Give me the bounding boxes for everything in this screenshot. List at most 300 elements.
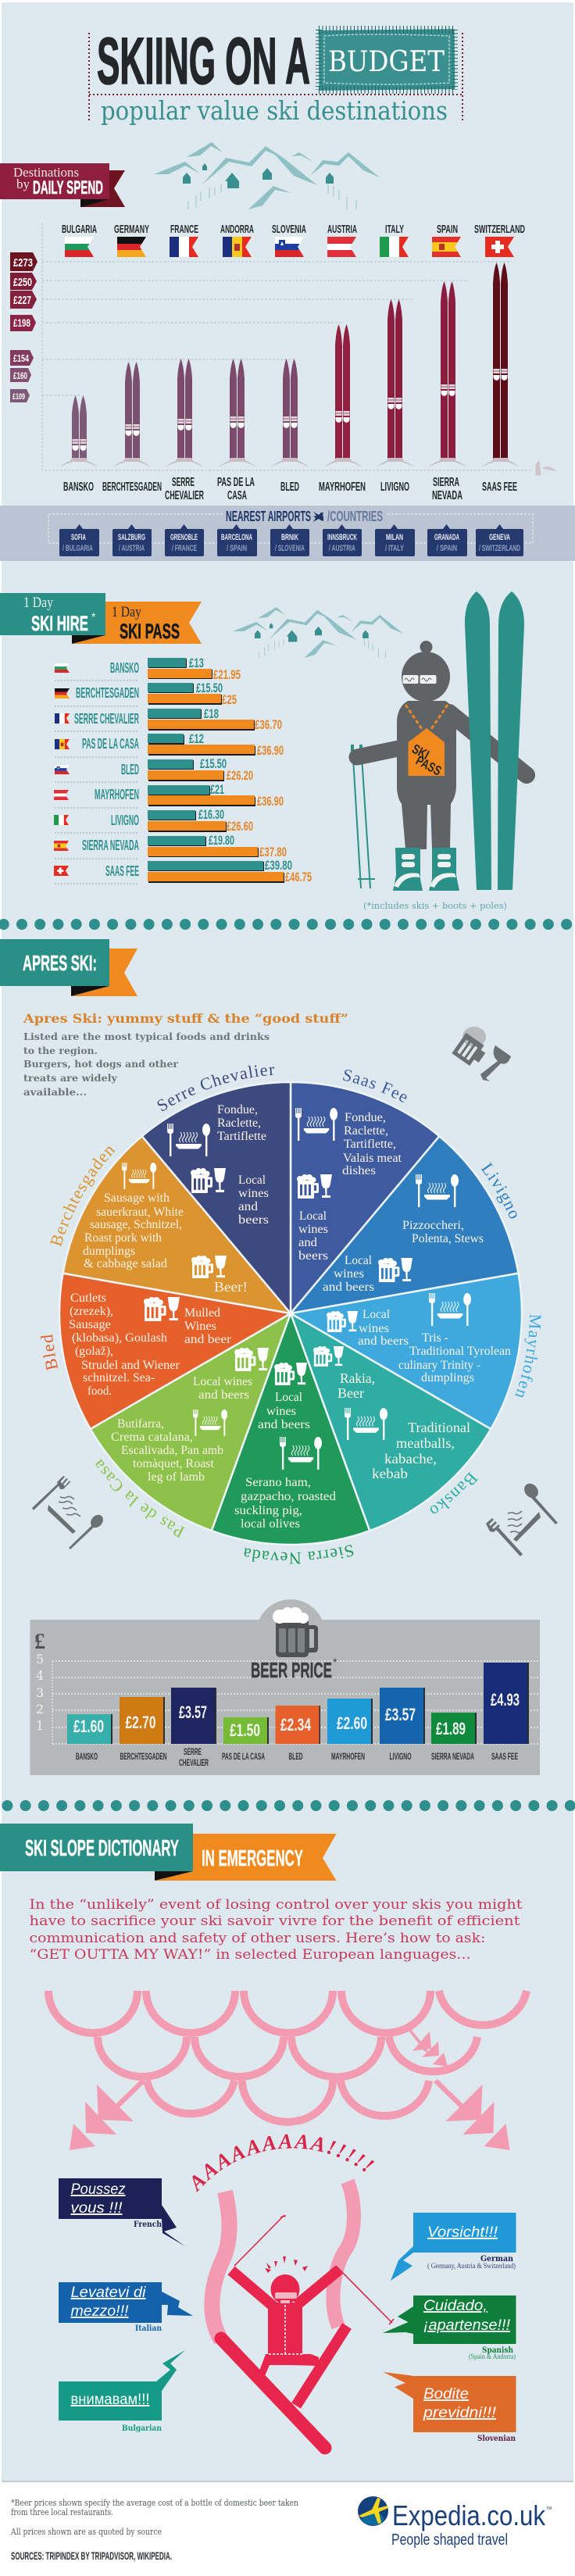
airport tags: BRNIK <box>281 533 298 542</box>
pie text: leg of lamb <box>148 1470 205 1484</box>
apres ski description: to the region. <box>23 1045 98 1056</box>
beer bar labels <box>76 1746 518 1768</box>
arrow: small <box>408 2028 448 2067</box>
slice: Bled <box>59 1274 291 1429</box>
beer bars: £3.57 <box>385 1705 416 1724</box>
pie text: Strudel and Wiener <box>81 1359 180 1372</box>
pie text: Escalivada, Pan amb <box>121 1444 223 1457</box>
ski hire and pass bar chart: £46.75 <box>285 870 312 884</box>
price tags: £109 <box>12 392 25 402</box>
slice: Serre Chevalier <box>142 1082 291 1313</box>
beer bar labels: BANSKO <box>76 1751 98 1762</box>
pie text: (klobasa), Goulash <box>72 1331 167 1345</box>
title <box>89 24 462 126</box>
expedia logo <box>358 2496 552 2549</box>
pie text: Valais meat <box>343 1152 402 1165</box>
footer notes: from three local restaurants. <box>11 2506 113 2517</box>
airport tags: GRENOBLE <box>170 533 198 542</box>
slice: Pas de la Casa <box>91 1313 291 1531</box>
country names and flags: SPAIN <box>437 223 458 236</box>
footer notes <box>10 2497 298 2562</box>
pie text: suckling pig, <box>234 1504 302 1517</box>
title: popular value ski destinations <box>101 95 448 126</box>
icon: beer mug <box>273 1607 318 1657</box>
ski hire and pass bar chart: £26.60 <box>227 819 253 834</box>
nearest airports band: /COUNTRIES <box>327 509 383 524</box>
pie text: Cutlets <box>70 1292 106 1305</box>
airport tags: / SWITZERLAND <box>479 544 520 553</box>
apres ski description: Listed are the most typical foods and drinks <box>23 1031 270 1042</box>
ski hire and pass bar chart: BERCHTESGADEN <box>76 685 139 701</box>
beer bar labels: LIVIGNO <box>389 1751 411 1762</box>
resort names: PAS DE LA <box>217 476 255 489</box>
pie text: Mulled <box>184 1306 220 1320</box>
airport tags: INNSBRUCK <box>327 533 357 542</box>
apres ski description <box>23 1031 270 1098</box>
speech bubble: German: Vorsicht!!! <box>427 2224 498 2241</box>
price tags: £154 <box>13 352 30 364</box>
pie text: Serano ham, <box>245 1476 311 1489</box>
country names and flags: FRANCE <box>170 223 198 236</box>
ribbon: destinations by daily spend: by <box>16 177 30 191</box>
airport tags: / AUSTRIA <box>119 544 145 553</box>
pie text: kabache, <box>384 1451 437 1467</box>
ski hire and pass bar chart: £25 <box>222 692 237 707</box>
ribbon: ski hire and ski pass <box>0 593 202 644</box>
pie text: Local <box>275 1391 302 1404</box>
ski tracks above skier <box>212 2181 354 2340</box>
price tags: £160 <box>13 370 27 381</box>
beer bars: £2.70 <box>125 1713 156 1732</box>
ski hire and pass bar chart: MAYRHOFEN <box>95 787 139 802</box>
beer price title: BEER PRICE <box>251 1658 332 1682</box>
pie text: dumplings <box>83 1245 135 1258</box>
ski hire and pass bar chart: £12 <box>189 731 204 746</box>
bar shadows <box>148 659 284 883</box>
speech bubble: Bulgarian <box>59 2350 185 2433</box>
pie text: Local <box>362 1308 390 1321</box>
country names and flags: BULGARIA <box>62 223 97 236</box>
beer bars: £3.57 <box>179 1702 207 1722</box>
icon: right cutlery <box>486 1481 558 1556</box>
pie text: and <box>298 1236 317 1249</box>
poles <box>352 745 375 888</box>
pie text: Beer <box>338 1385 364 1401</box>
speech bubble: Spanish: (Spain & Andorra) <box>469 2353 516 2360</box>
beer bars: £1.89 <box>436 1719 466 1738</box>
resort names: NEVADA <box>432 489 462 502</box>
apres ski description: treats are widely <box>23 1072 118 1084</box>
skier scream text: AAAAAAAAA!!!!! <box>192 2135 375 2192</box>
speech bubble: French: vous !!! <box>70 2200 123 2217</box>
pie ring labels <box>41 1066 541 1564</box>
expedia logo: People shaped travel <box>391 2531 508 2549</box>
pie text: Local <box>299 1209 327 1223</box>
pie text: Tris - <box>422 1331 448 1345</box>
pie text: (golaž), <box>75 1345 113 1358</box>
pie ring labels: Pas de la Casa <box>95 1458 185 1538</box>
airport tags: / BULGARIA <box>62 544 93 553</box>
price tags <box>10 252 38 402</box>
beer bar labels: BLED <box>289 1751 303 1762</box>
pie text: and beers <box>198 1388 249 1402</box>
icon: grey beer and wine <box>452 1027 511 1081</box>
slice: Bansko <box>291 1313 491 1531</box>
pie text: culinary Trinity - <box>398 1359 480 1372</box>
pie ring labels: Serre Chevalier <box>158 1066 274 1111</box>
apres ski description: Burgers, hot dogs and other <box>23 1058 178 1070</box>
lanyard <box>405 705 448 729</box>
airport tags: / FRANCE <box>172 544 197 553</box>
speech bubble: French: Poussez <box>70 2181 126 2198</box>
speech bubble: Spanish: Cuidado, <box>423 2298 488 2314</box>
arrow: left <box>70 2079 145 2150</box>
country names and flags: GERMANY <box>114 223 149 236</box>
pie text: and beers <box>258 1418 310 1431</box>
ribbon: destinations by daily spend <box>0 163 125 207</box>
speech bubble: Slovenian: previdni!!! <box>423 2405 497 2421</box>
pie ring labels: Berchtesgaden <box>50 1147 116 1247</box>
ribbon: apres ski <box>0 939 138 996</box>
beer bar labels: PAS DE LA CASA <box>222 1751 265 1762</box>
ribbon: ski hire and ski pass: * <box>91 610 96 623</box>
pie text: Beer! <box>214 1279 248 1295</box>
airport tags: GRANADA <box>434 533 459 542</box>
pie text: Fondue, <box>345 1111 386 1124</box>
slice: Saas Fee <box>291 1082 439 1313</box>
ribbon: ski hire and ski pass: SKI HIRE <box>31 612 88 635</box>
beer bar labels: SIERRA NEVADA <box>431 1751 474 1762</box>
ski hire and pass bar chart: LIVIGNO <box>111 813 139 828</box>
ski hire and pass bar chart: £36.90 <box>257 743 284 758</box>
airport tags: / SPAIN <box>437 544 457 553</box>
emergency intro text: have to sacrifice your ski savoir vivre for the benefit of efficient <box>30 1913 520 1929</box>
ski hire and pass bar chart: £19.80 <box>209 833 234 848</box>
footer notes: *Beer prices shown specify the average cost of a bottle of domestic beer taken <box>11 2497 298 2508</box>
ribbon: ski slope dictionary: SKI SLOPE DICTIONARY <box>25 1836 179 1861</box>
airport tags <box>59 524 523 556</box>
country names and flags: SWITZERLAND <box>474 223 525 236</box>
arrow: right <box>434 2079 509 2150</box>
ribbon: ski hire and ski pass: SKI PASS <box>120 620 180 643</box>
speech bubble: French <box>59 2178 185 2246</box>
pie text: schnitzel. Sea- <box>83 1371 155 1384</box>
ribbon: ski hire and ski pass: 1 Day <box>23 595 53 611</box>
ski hire and pass bar chart <box>54 656 312 884</box>
speech bubble: French: French <box>134 2221 162 2229</box>
resort names <box>63 476 517 502</box>
pie text: Traditional <box>408 1420 470 1435</box>
airport tags: / AUSTRIA <box>329 544 355 553</box>
apres ski heading: Apres Ski: yummy stuff & the “good stuff” <box>23 1011 348 1026</box>
speech bubble: Bulgarian: внимавам!!! <box>70 2392 150 2408</box>
pie text: local olives <box>241 1517 300 1531</box>
pie text: (zrezek), <box>70 1305 113 1318</box>
resort names: SERRE <box>172 476 195 489</box>
ribbon: ski slope dictionary: IN EMERGENCY <box>202 1846 303 1871</box>
ski hire and pass bar chart: SERRE CHEVALIER <box>74 711 139 727</box>
beer bars: £4.93 <box>491 1690 520 1710</box>
resort names: BERCHTESGADEN <box>102 481 162 494</box>
ski hire and pass bar chart: BANSKO <box>110 660 139 676</box>
ski pass tag: SKI <box>409 741 431 763</box>
pie text: Raclette, <box>217 1117 261 1130</box>
pie text: Crema catalana, <box>111 1431 193 1444</box>
ski pass tag <box>408 728 445 778</box>
ribbon: apres ski: APRES SKI: <box>23 951 97 975</box>
pie text: Local wines <box>193 1375 252 1388</box>
speech bubble: Spanish <box>383 2296 516 2360</box>
skier with ski pass illustration <box>352 591 527 891</box>
y axis <box>34 1630 45 1733</box>
emergency intro text <box>30 1897 523 1963</box>
ski hire and pass bar chart: SIERRA NEVADA <box>82 838 139 853</box>
pie text: wines <box>334 1267 364 1281</box>
ski hire and pass bar chart: £15.50 <box>200 756 227 771</box>
y axis: 5 <box>36 1652 44 1667</box>
beer price panel <box>30 1599 540 1775</box>
resort names: CASA <box>227 489 247 502</box>
mountains illustration 2 <box>233 607 403 658</box>
pie ring labels: Bled <box>41 1334 58 1370</box>
pie text: Raclette, <box>344 1124 388 1138</box>
speech bubble: German: ( Germany, Austria & Switzerland) <box>427 2262 516 2270</box>
caption: includes: (*includes skis + boots + poles) <box>363 901 507 911</box>
speech bubble: Italian <box>59 2282 193 2333</box>
pie text: meatballs, <box>396 1435 455 1451</box>
speech bubble: Slovenian: Slovenian <box>477 2435 516 2443</box>
country names and flags: ANDORRA <box>220 223 254 236</box>
speech bubble: Spanish: ¡apartense!!! <box>423 2317 511 2334</box>
pie text: and beer <box>184 1333 232 1346</box>
ski hire and pass bar chart: £15.50 <box>196 681 223 695</box>
pie chart: food and drink by resort <box>59 1082 522 1545</box>
icon: plane <box>313 512 323 522</box>
slice: Sierra Nevada <box>212 1313 370 1545</box>
country names and flags: AUSTRIA <box>327 223 357 236</box>
tall skis <box>465 591 491 890</box>
pie text: dumplings <box>421 1371 474 1384</box>
pink ski tracks diagram <box>48 1991 527 2150</box>
skis bar chart <box>59 263 556 475</box>
ski hire and pass bar chart: £26.20 <box>227 768 253 783</box>
ski hire and pass bar chart: £37.80 <box>259 845 287 859</box>
ski hire and pass bar chart: £39.80 <box>265 858 292 873</box>
expedia logo: Expedia.co.uk <box>392 2499 546 2531</box>
speech bubble: German: German <box>480 2255 514 2263</box>
footer notes: All prices shown are as quoted by source <box>10 2526 162 2537</box>
emergency intro text: “GET OUTTA MY WAY!” in selected European languages... <box>30 1947 470 1963</box>
airport tags: / SLOVENIA <box>275 544 305 553</box>
beer bar labels: SAAS FEE <box>491 1751 518 1762</box>
resort names: CHEVALIER <box>165 489 204 502</box>
goggles <box>403 675 436 684</box>
title: SKIING ON A <box>97 24 310 98</box>
pie text: beers <box>298 1249 328 1263</box>
shock marks <box>265 2256 308 2273</box>
pie text: Butifarra, <box>117 1417 164 1431</box>
left arm <box>357 749 398 757</box>
resort names: BLED <box>280 481 299 494</box>
beer price panel: * <box>333 1656 338 1668</box>
pie ring labels: Livigno <box>481 1162 517 1219</box>
pie text: beers <box>238 1213 269 1227</box>
airport tags: / ITALY <box>385 544 404 553</box>
poles <box>234 2215 392 2323</box>
pie text: wines <box>266 1405 296 1418</box>
airport tags: MILAN <box>386 533 403 542</box>
beer bar labels: MAYRHOFEN <box>331 1751 365 1762</box>
body <box>268 2303 302 2357</box>
arms and skis <box>221 2270 347 2448</box>
pie text: wines <box>238 1187 269 1200</box>
beer bar labels: BERCHTESGADEN <box>120 1751 167 1762</box>
resort names: MAYRHOFEN <box>319 481 366 494</box>
falling skier illustration <box>221 2215 394 2448</box>
footer notes: SOURCES: TRIPINDEX BY TRIPADVISOR, WIKIPEDIA. <box>11 2549 172 2562</box>
pie text: gazpacho, roasted <box>241 1490 336 1503</box>
ski hire and pass bar chart: SAAS FEE <box>105 863 139 879</box>
ski pass tag: PASS <box>413 753 444 778</box>
ski hire and pass bar chart: £21.95 <box>213 667 241 682</box>
country names and flags <box>62 223 525 257</box>
ribbon: ski hire and ski pass: 1 Day <box>112 604 141 620</box>
pie text: Traditional Tyrolean <box>409 1345 511 1358</box>
boots <box>393 848 459 891</box>
beer bars: £1.50 <box>230 1720 260 1740</box>
price tags: £198 <box>13 316 30 329</box>
pie ring labels: Bansko <box>430 1472 478 1514</box>
pie text: wines <box>298 1223 328 1236</box>
resort names: BANSKO <box>63 481 94 494</box>
airport tags: SOFIA <box>71 533 86 542</box>
price tags: £250 <box>13 276 32 289</box>
airport tags: SALZBURG <box>118 533 145 542</box>
pie text: Tartiflette, <box>344 1138 396 1151</box>
body and head <box>397 641 456 849</box>
y axis: 3 <box>36 1685 44 1700</box>
price tags: £227 <box>13 294 31 307</box>
slice: Berchtesgaden <box>62 1136 291 1313</box>
pie text: Roast pork with <box>84 1231 162 1245</box>
price tags: £273 <box>13 256 33 270</box>
ribbon: destinations by daily spend: Destinations <box>13 165 79 180</box>
beer bars: £2.34 <box>280 1715 312 1735</box>
speech bubble: Italian: Italian <box>135 2324 162 2333</box>
pie text: kebab <box>372 1466 408 1481</box>
pie text: & cabbage salad <box>84 1257 167 1270</box>
y axis: 1 <box>36 1718 44 1733</box>
ski hire and pass bar chart: BLED <box>121 762 139 777</box>
pie text: Polenta, Stews <box>412 1232 484 1245</box>
pie ring labels: Sierra Nevada <box>244 1545 353 1564</box>
mountains illustration <box>154 142 380 209</box>
right arm <box>449 713 527 775</box>
beer bar labels: SERRE <box>184 1746 202 1757</box>
emergency intro text: In the “unlikely” event of losing control over your skis you might <box>30 1897 523 1913</box>
country names and flags: ITALY <box>385 223 404 236</box>
slice: Livigno <box>291 1136 519 1313</box>
ski hire and pass bar chart: £16.30 <box>198 807 224 822</box>
nearest airports band <box>0 506 575 561</box>
pie text: wines <box>359 1322 389 1335</box>
speech bubble: Slovenian <box>384 2372 516 2443</box>
pie text: sausage, Schnitzel, <box>90 1218 182 1231</box>
ribbon: destinations by daily spend: DAILY SPEND <box>33 177 103 198</box>
resort names: LIVIGNO <box>380 481 409 494</box>
nearest airports band: NEAREST AIRPORTS <box>226 509 311 524</box>
ribbon: ski slope dictionary <box>0 1824 336 1881</box>
pie text: and beers <box>358 1334 409 1348</box>
ski hire and pass bar chart: PAS DE LA CASA <box>82 736 139 752</box>
pie text: Tartiflette <box>217 1130 266 1143</box>
pie text: dishes <box>342 1164 376 1177</box>
pie text: tomàquet, Roast <box>133 1457 215 1470</box>
airport tags: / SPAIN <box>227 544 247 553</box>
ski hire and pass bar chart: £36.70 <box>255 717 282 732</box>
apres ski description: available... <box>23 1086 87 1098</box>
expedia logo: TM <box>546 2506 552 2511</box>
ski hire and pass bar chart: £36.90 <box>257 794 284 809</box>
speech bubble: Italian: Levatevi di <box>70 2285 146 2301</box>
pie text: and <box>238 1200 258 1213</box>
airport tags: BARCELONA <box>221 533 252 542</box>
icon: left cutlery <box>32 1476 105 1549</box>
y axis: £ <box>34 1630 45 1654</box>
country names and flags: SLOVENIA <box>272 223 306 236</box>
head <box>270 2274 300 2304</box>
pie icons <box>122 1108 471 1470</box>
beer bars <box>67 1663 529 1744</box>
speech bubble: German <box>391 2213 516 2281</box>
budget patch: BUDGET <box>328 46 445 78</box>
emergency intro text: communication and safety of other users. Here’s how to ask: <box>30 1931 486 1946</box>
speech bubble: Slovenian: Bodite <box>423 2386 469 2403</box>
beer bars: £1.60 <box>73 1717 104 1736</box>
icon: globe <box>358 2496 388 2526</box>
legs <box>258 2354 319 2383</box>
y axis: 2 <box>36 1702 44 1717</box>
pie ring labels: Saas Fee <box>342 1070 406 1102</box>
pie text: and beers <box>323 1281 374 1294</box>
ski hire and pass bar chart: £13 <box>189 656 204 670</box>
speech bubble: Italian: mezzo!!! <box>70 2303 129 2320</box>
pie text: Sausage <box>69 1318 111 1331</box>
beer bar labels: CHEVALIER <box>179 1757 209 1768</box>
pie text: sauerkraut, White <box>96 1206 184 1219</box>
y axis: 4 <box>36 1668 44 1683</box>
resort names: SIERRA <box>433 476 459 489</box>
pie text: Rakia, <box>340 1370 375 1386</box>
ski hire and pass bar chart: £18 <box>204 706 219 721</box>
pie text <box>69 1103 511 1531</box>
pie text: Sausage with <box>104 1192 170 1205</box>
ski hire and pass bar chart: £21 <box>210 782 224 797</box>
slice: Mayrhofen <box>291 1274 522 1429</box>
pie text: Local <box>238 1174 266 1187</box>
beer bars: £2.60 <box>337 1713 367 1733</box>
resort names: SAAS FEE <box>482 481 517 494</box>
pie text: Wines <box>184 1320 216 1333</box>
suit stitching <box>269 2305 303 2354</box>
pie ring labels: Mayrhofen <box>515 1314 541 1397</box>
pie text: food. <box>88 1384 112 1398</box>
airport tags: GENEVA <box>489 533 510 542</box>
budget patch <box>319 29 455 91</box>
speech bubble: Bulgarian: Bulgarian <box>122 2424 162 2433</box>
speech bubble: Spanish: Spanish <box>482 2346 514 2355</box>
pie text: Fondue, <box>217 1103 258 1117</box>
